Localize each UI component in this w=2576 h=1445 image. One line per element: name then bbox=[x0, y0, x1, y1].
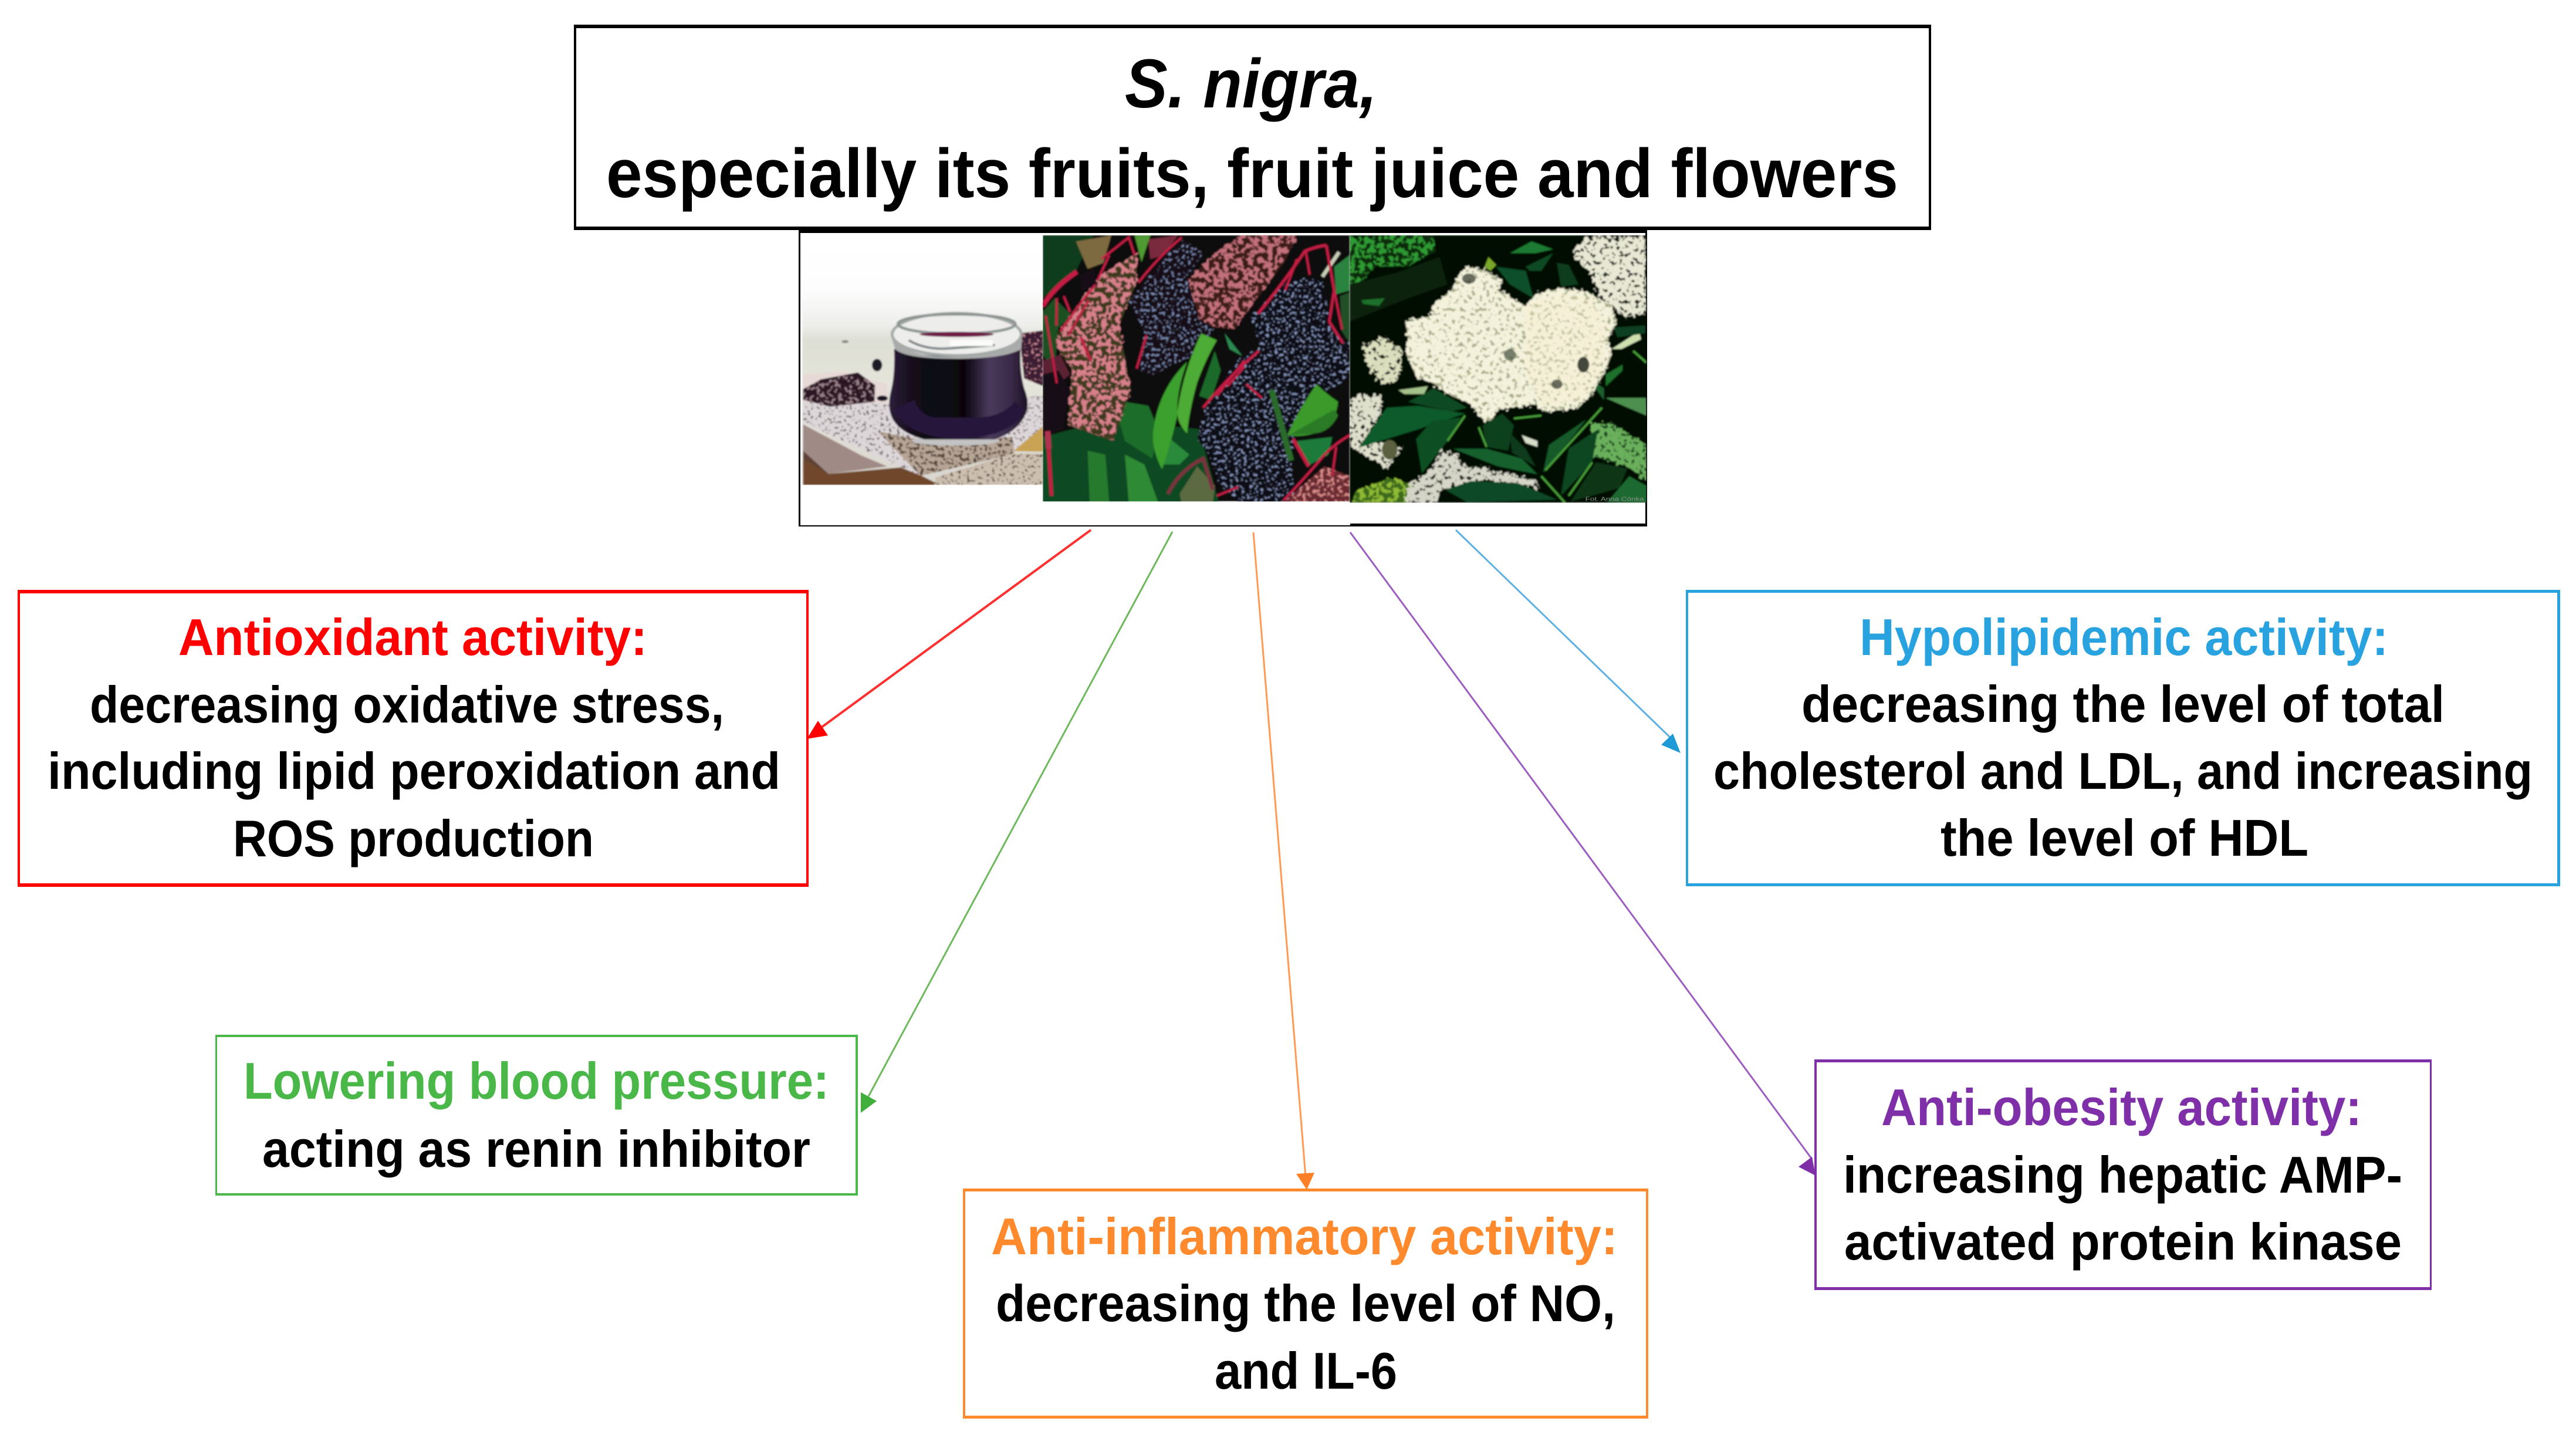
antioxidant description: ROS production bbox=[233, 809, 594, 867]
photo credit: Fot. Anna Cónka bbox=[1586, 496, 1644, 502]
panel: lowering blood pressure bbox=[215, 1035, 858, 1196]
anti-inflammatory heading: Anti-inflammatory activity: bbox=[991, 1207, 1618, 1265]
left pink berry mass bbox=[1054, 253, 1137, 441]
photo frame bbox=[799, 229, 1647, 526]
title box bbox=[574, 25, 1931, 230]
red stems bbox=[1043, 238, 1350, 501]
anti-obesity description bbox=[1843, 1146, 2402, 1271]
hypolipidemic description: decreasing the level of total bbox=[1801, 675, 2445, 733]
top centre pink mass bbox=[1179, 235, 1297, 329]
anti-inflammatory description: decreasing the level of NO, bbox=[996, 1274, 1615, 1332]
main flower head bbox=[1405, 267, 1617, 421]
photo panel: juice, fruits and flowers bbox=[799, 229, 1647, 526]
arrow: to anti-inflammatory bbox=[1253, 532, 1314, 1190]
hypolipidemic description: the level of HDL bbox=[1941, 809, 2308, 867]
leaves bbox=[1358, 406, 1465, 448]
antioxidant description bbox=[48, 676, 780, 867]
leaves bbox=[1135, 235, 1150, 262]
lower right green umbel bbox=[1590, 423, 1647, 480]
blood pressure heading: Lowering blood pressure: bbox=[244, 1052, 829, 1110]
photo: elderflowers bbox=[1350, 235, 1647, 503]
arrow: to hypolipidemic bbox=[1456, 530, 1681, 753]
panel: hypolipidemic activity bbox=[1686, 590, 2560, 886]
title text bbox=[606, 45, 1898, 212]
anti-obesity description: increasing hepatic AMP- bbox=[1843, 1146, 2402, 1204]
arrow: to anti-obesity bbox=[1350, 532, 1816, 1176]
panel: anti-obesity activity bbox=[1814, 1059, 2432, 1290]
panel: antioxidant activity bbox=[18, 590, 809, 887]
photo: elderberry fruits bbox=[1043, 235, 1350, 502]
dark berry masses bbox=[1129, 239, 1215, 376]
title text: S. nigra, bbox=[1125, 45, 1377, 123]
blood pressure description: acting as renin inhibitor bbox=[262, 1120, 810, 1178]
anti-inflammatory description bbox=[996, 1274, 1615, 1400]
arrow: to blood pressure bbox=[861, 532, 1172, 1113]
arrow: to antioxidant bbox=[807, 530, 1091, 739]
title text: especially its fruits, fruit juice and flowers bbox=[606, 135, 1898, 212]
photo: elderberry juice jar bbox=[802, 303, 1043, 485]
hypolipidemic heading: Hypolipidemic activity: bbox=[1860, 608, 2388, 666]
antioxidant description: decreasing oxidative stress, bbox=[90, 676, 724, 734]
anti-obesity heading: Anti-obesity activity: bbox=[1881, 1078, 2362, 1136]
antioxidant heading: Antioxidant activity: bbox=[178, 608, 647, 666]
hypolipidemic description bbox=[1713, 675, 2533, 867]
antioxidant description: including lipid peroxidation and bbox=[48, 742, 780, 800]
anti-inflammatory description: and IL-6 bbox=[1215, 1342, 1397, 1400]
panel: anti-inflammatory activity bbox=[963, 1189, 1648, 1419]
anti-obesity description: activated protein kinase bbox=[1844, 1213, 2402, 1271]
